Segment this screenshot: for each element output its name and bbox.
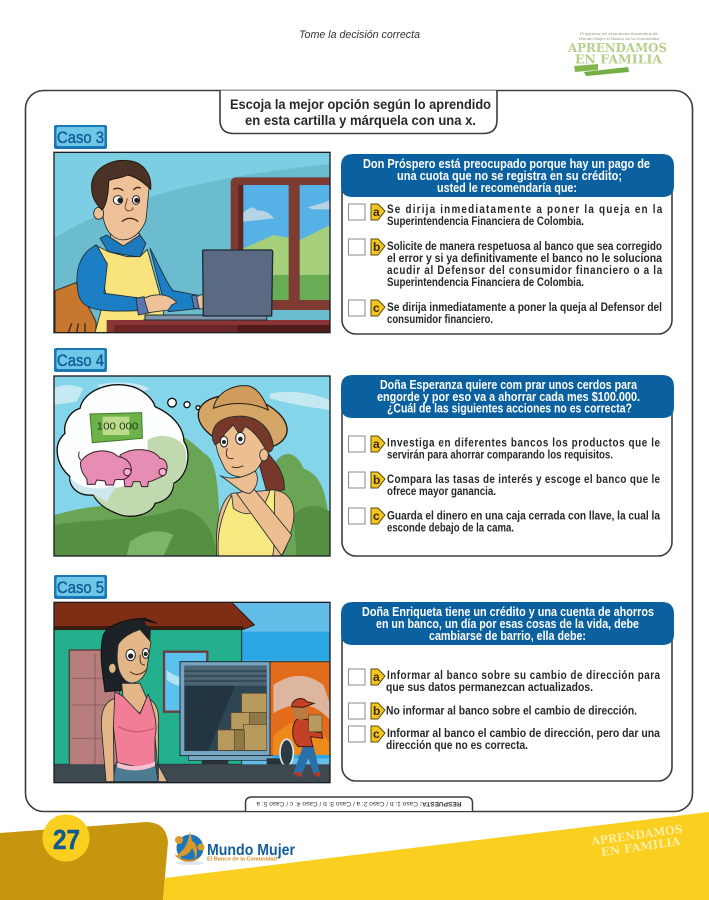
- option c: c: [373, 301, 380, 315]
- option a: Informar al banco sobre su cambio de dirección para: [387, 669, 661, 682]
- option a: [348, 203, 663, 228]
- option b: b: [373, 704, 380, 718]
- panel: Caso 4 question: [341, 375, 674, 556]
- man: [77, 160, 203, 333]
- panel: Caso 4 question: engorde y por eso va a ahorrar cada mes $100.000.: [377, 390, 640, 404]
- woman: [101, 618, 167, 782]
- truck: [180, 662, 330, 768]
- panel: Caso 5 question: en un banco, un día por esas cosas de la vida, debe: [376, 617, 639, 631]
- option a: Superintendencia Financiera de Colombia.: [387, 216, 584, 228]
- badge: Caso 4: [54, 348, 107, 372]
- option c: esconde debajo de la cama.: [387, 522, 514, 534]
- illustration: man worried at laptop: [54, 152, 330, 333]
- option c: Informar al banco el cambio de dirección, pero dar una: [387, 728, 661, 740]
- thought bubble: [57, 385, 188, 516]
- option a: [348, 669, 661, 694]
- panel: Caso 3 question: usted le recomendaría que:: [437, 181, 577, 195]
- ground: [54, 764, 330, 783]
- option a: servirán para ahorrar comparando los requisitos.: [387, 450, 613, 462]
- option c: [348, 300, 662, 326]
- logo: Mundo Mujer: [174, 831, 295, 865]
- panel: Caso 4 question: Doña Esperanza quiere com prar unos cerdos para: [380, 378, 638, 392]
- footer brand text: APRENDAMOS: [590, 822, 684, 849]
- option b: acudir al Defensor del consumidor financiero o a la: [387, 264, 663, 277]
- footer brand text: EN FAMILIA: [600, 834, 682, 859]
- option a: a: [373, 670, 380, 684]
- panel: Caso 5 question: [341, 602, 674, 781]
- option c: [348, 726, 661, 752]
- footer: brown corner shape: [0, 822, 168, 900]
- boxes: [218, 693, 267, 750]
- illustration: woman dreaming of pigs: [54, 376, 330, 556]
- main frame: [26, 90, 692, 812]
- banknote: 100 000: [97, 422, 138, 433]
- banknote: [90, 413, 142, 443]
- logo: Aprendamos en Familia: EN FAMILIA: [575, 52, 662, 66]
- option b: Solicite de manera respetuosa al banco que sea corregido: [387, 241, 662, 253]
- illustration: woman moving house with truck: [54, 602, 330, 783]
- option a: [348, 436, 660, 462]
- option b: ofrece mayor ganancia.: [387, 486, 496, 498]
- instruction heading tab: Escoja la mejor opción según lo aprendido: [230, 97, 491, 112]
- option c: dirección que no es correcta.: [386, 740, 528, 752]
- page number badge: [42, 814, 90, 862]
- option b: No informar al banco sobre el cambio de dirección.: [386, 706, 637, 718]
- option a: Investiga en diferentes bancos los productos que le: [387, 437, 660, 450]
- panel: Caso 3 question: una cuota que no se registra en su crédito;: [397, 169, 622, 183]
- instruction heading tab: [220, 90, 497, 134]
- page title: Tome la decisión correcta: [299, 29, 420, 41]
- logo: Aprendamos en Familia: [567, 31, 667, 76]
- woman: [193, 386, 294, 556]
- instruction heading tab: en esta cartilla y márquela con una x.: [245, 113, 476, 128]
- badge: Caso 5: [54, 575, 107, 599]
- footer: yellow band: [163, 812, 709, 900]
- option c: c: [373, 509, 380, 523]
- delivery man: [292, 699, 323, 777]
- option b: Compara las tasas de interés y escoge el banco que le: [387, 473, 660, 486]
- option a: a: [373, 437, 380, 451]
- panel: Caso 5 question: Doña Enriqueta tiene un crédito y una cuenta de ahorros: [362, 605, 654, 619]
- option c: Se dirija inmediatamente a poner la queja al Defensor del: [387, 302, 662, 314]
- answer key tab (upside down): RESPUESTA: Caso 1: b / Caso 2: a / Caso 3: b / Caso 4: c / Caso 5: a: [256, 800, 462, 807]
- bushes: [54, 435, 330, 556]
- panel: Caso 3 question: [341, 154, 674, 334]
- page number badge: 27: [53, 824, 80, 855]
- table: [107, 320, 330, 333]
- option a: Se dirija inmediatamente a poner la queja en la: [387, 203, 663, 216]
- option b: b: [373, 473, 380, 487]
- option c: consumidor financiero.: [387, 314, 493, 326]
- logo: Mundo Mujer: El Banco de la Comunidad: [207, 856, 277, 862]
- option b: [348, 703, 637, 719]
- option b: b: [373, 240, 380, 254]
- footer brand text: [590, 822, 685, 860]
- window: [231, 177, 330, 310]
- option b: Superintendencia Financiera de Colombia.: [387, 277, 584, 289]
- small bubbles: [168, 398, 200, 410]
- option c: [348, 508, 661, 534]
- option a: que sus datos permanezcan actualizados.: [386, 682, 593, 694]
- option b: [348, 239, 663, 289]
- badge: Caso 3: [54, 125, 107, 149]
- panel: Caso 4 question: ¿Cuál de las siguientes acciones no es correcta?: [387, 402, 632, 416]
- panel: Caso 3 question: Don Próspero está preocupado porque hay un pago de: [363, 157, 650, 171]
- laptop: [145, 250, 273, 320]
- pigs: [79, 450, 167, 487]
- chair: [55, 283, 96, 333]
- badge: Caso 5: Caso 5: [57, 579, 104, 597]
- logo: Aprendamos en Familia: Mundo Mujer el Banco de la Comunidad: [579, 36, 659, 41]
- badge: Caso 3: Caso 3: [57, 129, 104, 147]
- panel: Caso 5 question: cambiarse de barrio, ella debe:: [429, 629, 586, 643]
- answer key tab (upside down): [246, 797, 472, 811]
- logo: Mundo Mujer: Mundo Mujer: [207, 842, 295, 859]
- option c: Guarda el dinero en una caja cerrada con llave, la cual la: [387, 510, 661, 522]
- logo: Aprendamos en Familia: APRENDAMOS: [567, 40, 667, 55]
- option c: c: [373, 727, 380, 741]
- house: [54, 602, 254, 765]
- option b: [348, 472, 660, 498]
- badge: Caso 4: Caso 4: [57, 352, 104, 370]
- option a: a: [373, 205, 380, 219]
- logo: Aprendamos en Familia: Programa de educación financiera de: [580, 31, 659, 36]
- option b: el error y si ya definitivamente el banco no le soluciona: [387, 253, 663, 265]
